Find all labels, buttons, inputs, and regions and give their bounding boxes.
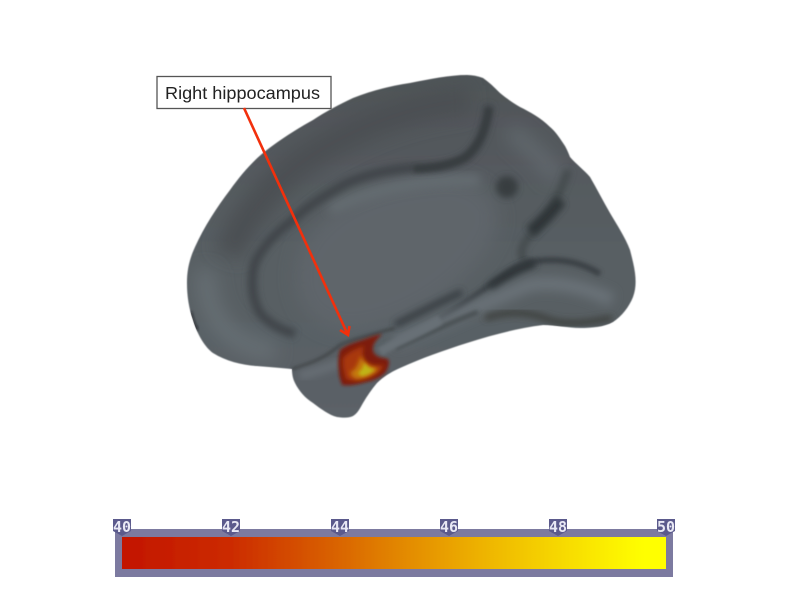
hippocampal stem — [380, 320, 440, 352]
upper gyrus shading — [219, 118, 404, 256]
parieto-occipital sulcus — [522, 170, 568, 262]
dark rim at the frontal pole — [190, 312, 197, 330]
arrow: label to hippocampus — [244, 108, 350, 335]
infographic: brain activation map — [113, 74, 675, 577]
fold between hemisphere and temporal lobe — [292, 328, 395, 369]
brain surface — [187, 75, 636, 418]
tick 40: 40 — [113, 518, 131, 536]
cingulate sulcus — [246, 144, 483, 339]
tick 42: 42 — [222, 518, 240, 536]
scale gradient — [122, 537, 666, 569]
tick 50: 50 — [657, 518, 675, 536]
label: Right hippocampus — [157, 76, 331, 108]
scale frame — [115, 529, 673, 577]
activation: right hippocampus — [338, 334, 389, 385]
inner medial lighter region — [319, 189, 490, 244]
tick 44: 44 — [331, 518, 349, 536]
label: Right hippocampus: Right hippocampus — [165, 83, 320, 103]
colour scale bar — [113, 518, 675, 577]
lingual ridge — [395, 284, 612, 342]
tick 46: 46 — [440, 518, 458, 536]
calcarine sulcus — [440, 260, 600, 320]
lower dark fold — [485, 313, 612, 323]
parietal pit — [496, 176, 518, 198]
tick 48: 48 — [549, 518, 567, 536]
